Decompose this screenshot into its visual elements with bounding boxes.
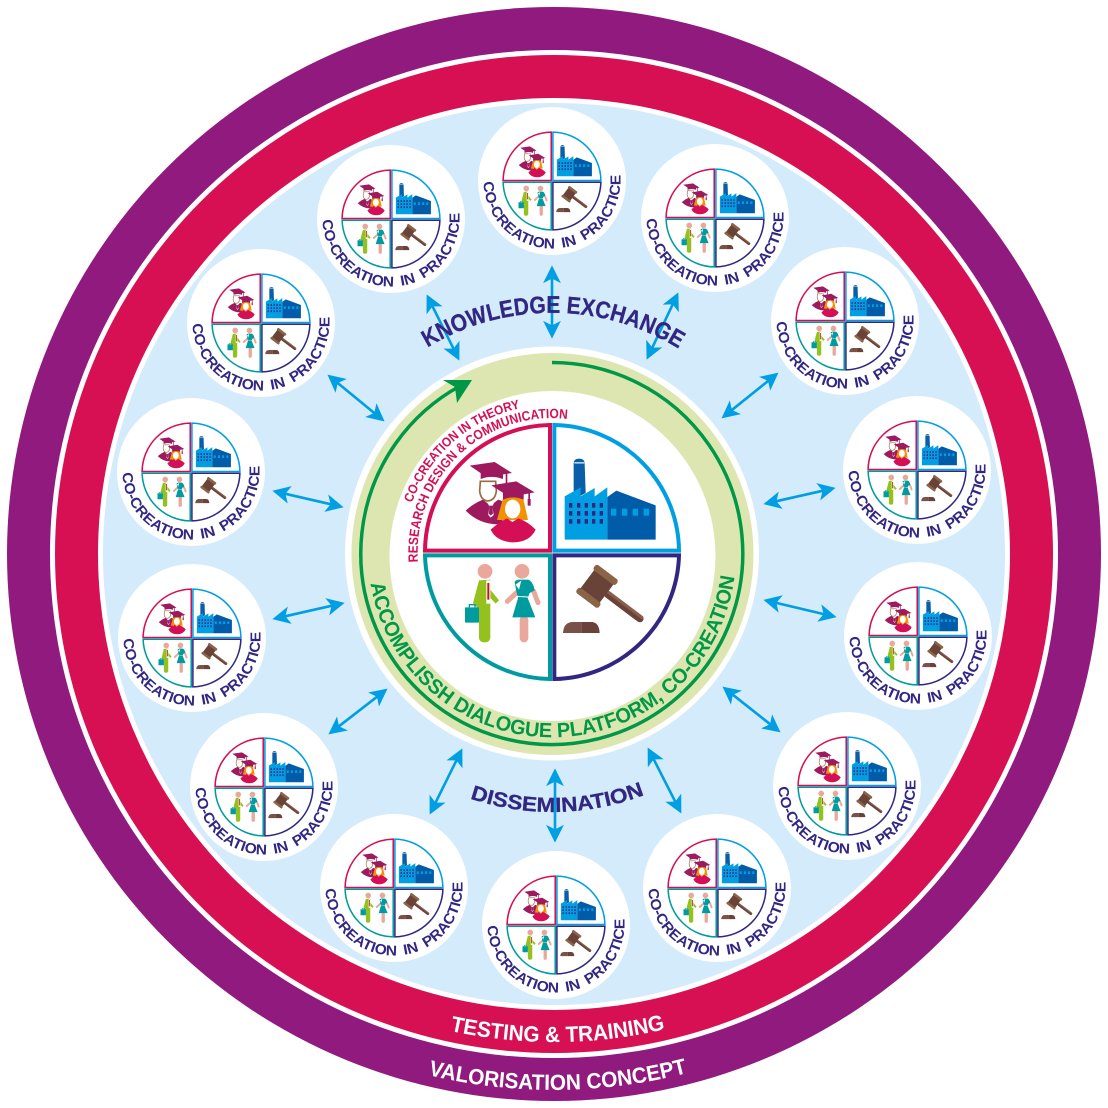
heading: knowledge exchange: KNOWLEDGE EXCHANGE <box>420 296 686 348</box>
platform green ring <box>352 353 754 755</box>
central platform <box>345 346 759 760</box>
badge: co-creation in practice, 2: CO-CREATION IN PRACTICE <box>646 212 784 286</box>
badge: co-creation in practice, 14: CO-CREATION IN PRACTICE <box>322 213 460 287</box>
badge: co-creation in practice, 6 <box>773 712 921 860</box>
label: accomplissh dialogue platform: ACCOMPLISSH DIALOGUE PLATFORM, CO-CREATION <box>370 576 734 738</box>
badge: co-creation in practice, 7 <box>643 814 791 962</box>
platform white border <box>345 346 759 760</box>
cycle arrow line <box>361 362 743 744</box>
badge: co-creation in practice, 2 <box>641 144 789 292</box>
label: co-creation in theory: CO-CREATION IN THEORY <box>404 400 518 502</box>
badge: co-creation in practice, 7: CO-CREATION IN PRACTICE <box>648 882 786 956</box>
badge: co-creation in practice, 4: CO-CREATION IN PRACTICE <box>848 464 986 538</box>
badge: co-creation in practice, 12: CO-CREATION IN PRACTICE <box>122 466 260 540</box>
label: research design and communication: RESEARCH DESIGN & COMMUNICATION <box>408 408 568 562</box>
label: testing and training: TESTING & TRAINING <box>452 1016 664 1042</box>
field panel <box>103 103 1005 1005</box>
badge: co-creation in practice, 3: CO-CREATION IN PRACTICE <box>776 315 914 389</box>
platform inner white disc <box>390 391 716 721</box>
badge: co-creation in practice, 11: CO-CREATION IN PRACTICE <box>124 632 260 706</box>
badge: co-creation in practice, 9: CO-CREATION IN PRACTICE <box>326 882 462 956</box>
badge: co-creation in practice, 5 <box>844 562 992 710</box>
badge: co-creation in practice, bottom: CO-CREATION IN PRACTICE <box>488 919 624 993</box>
badge: co-creation in practice, 14 <box>317 145 465 293</box>
badge: co-creation in practice, bottom <box>482 851 630 999</box>
arrows: two-way links between platform and projects <box>279 272 830 836</box>
badge: co-creation in practice, 13 <box>187 249 335 397</box>
light blue field <box>98 98 1010 1010</box>
badge: co-creation in practice, 6: CO-CREATION IN PRACTICE <box>778 780 916 854</box>
cycle arrow head <box>443 380 472 403</box>
badge: co-creation in practice, 4 <box>843 396 991 544</box>
badge: co-creation in practice, top: CO-CREATION IN PRACTICE <box>484 175 620 249</box>
badge: co-creation in practice, top <box>478 107 626 255</box>
badge: co-creation in practice, 9 <box>320 814 468 962</box>
badge: co-creation in practice, 10: CO-CREATION IN PRACTICE <box>196 781 332 855</box>
icon: four quadrant stakeholders <box>425 425 679 679</box>
badge: co-creation in practice, 12 <box>117 398 265 546</box>
badge: co-creation in practice, 10 <box>190 713 338 861</box>
badge: co-creation in practice, 3 <box>771 247 919 395</box>
badge: co-creation in practice, 11 <box>118 564 266 712</box>
badge: co-creation in practice, 13: CO-CREATION IN PRACTICE <box>192 317 330 391</box>
badge: co-creation in practice, 5: CO-CREATION IN PRACTICE <box>850 630 986 704</box>
heading: dissemination: DISSEMINATION <box>471 782 644 812</box>
label: valorisation concept: VALORISATION CONCEPT <box>432 1058 684 1090</box>
